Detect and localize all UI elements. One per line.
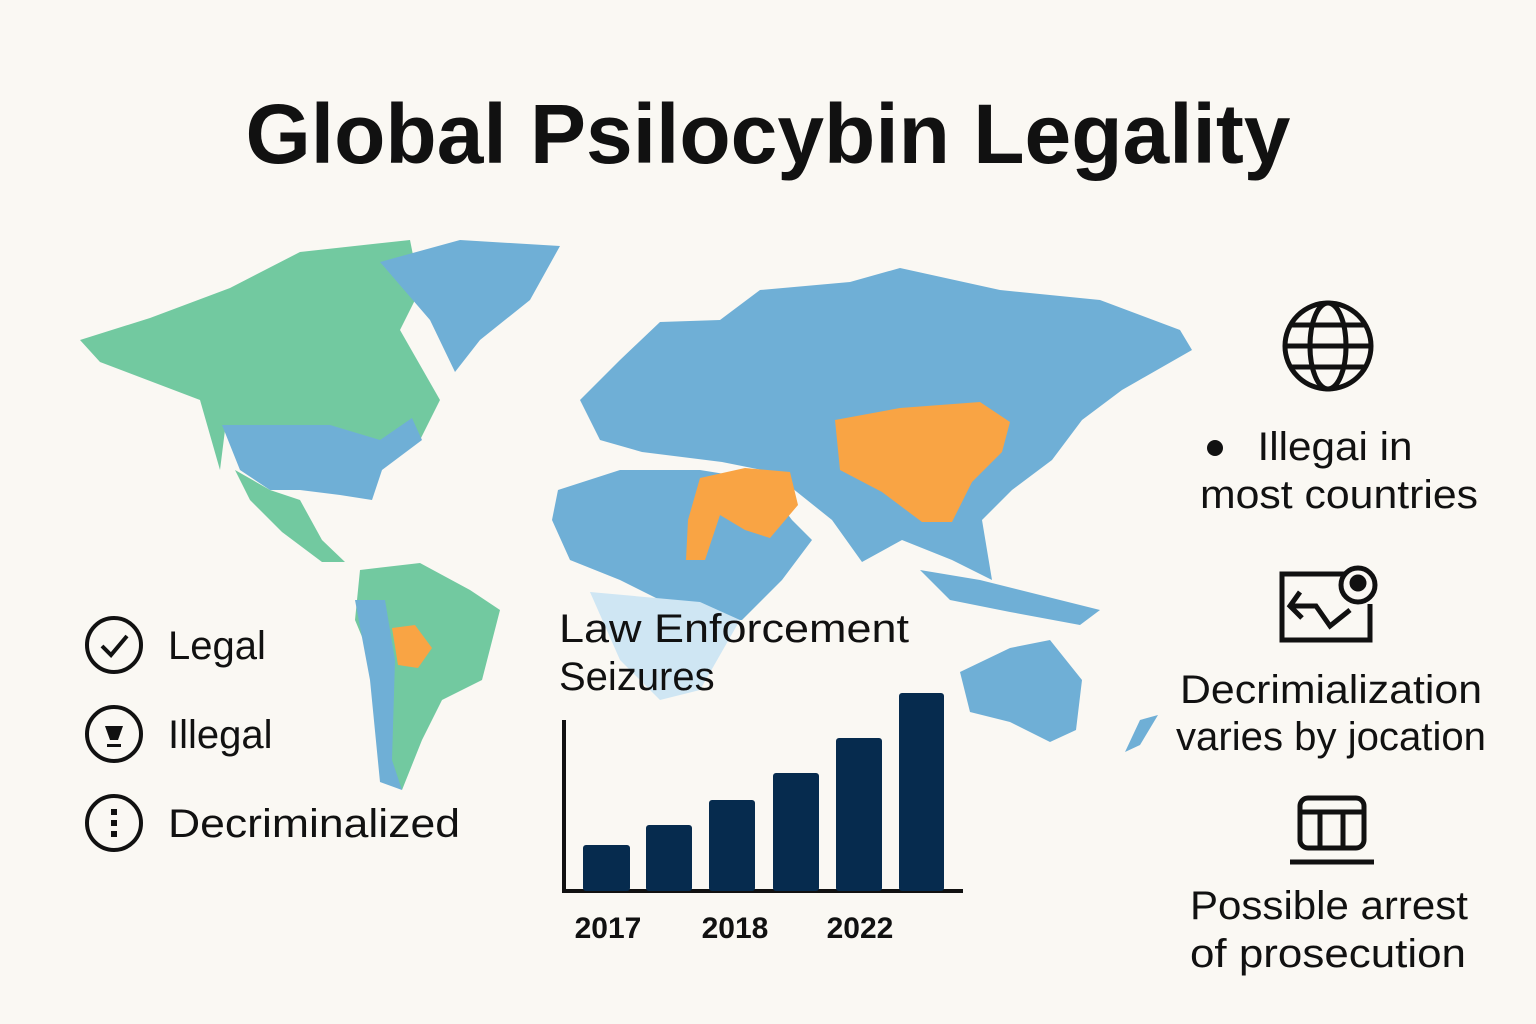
region: Australia (960, 640, 1082, 742)
region: South America (355, 563, 500, 790)
text: illegal in most countries: most countries (1200, 473, 1478, 517)
text: possible arrest: Possible arrest (1190, 884, 1468, 928)
region: Mexico (235, 470, 345, 562)
chart heading: Law Enforcement (559, 607, 909, 651)
text: possible arrest: of prosecution (1190, 932, 1466, 976)
bar chart: 2017 (575, 912, 641, 945)
icon: arrest (1290, 798, 1374, 862)
region: Greenland (380, 240, 560, 372)
region: Canada & Alaska (legal) (80, 240, 440, 470)
region: Bolivia (decriminalized) (392, 625, 432, 668)
icon: globe (1285, 303, 1371, 389)
legend item: illegal (87, 707, 273, 761)
title: Global Psilocybin Legality (246, 87, 1291, 181)
region: Africa (552, 470, 812, 620)
legend item: decriminalized: Decriminalized (168, 802, 460, 846)
region: USA (222, 418, 422, 500)
bar chart (562, 693, 963, 945)
text: decriminalization varies: varies by jocation (1176, 715, 1486, 759)
region: China (decriminalized) (835, 402, 1010, 522)
legend item: illegal: Illegal (168, 713, 273, 757)
legend item: legal: Legal (168, 624, 266, 668)
bar chart: 2022 (827, 912, 893, 945)
text: illegal in most countries: Illegai in (1258, 425, 1412, 469)
text: decriminalization varies: Decrimialization (1180, 668, 1482, 712)
text: illegal in most countries (1200, 425, 1478, 517)
region: Eurasia (580, 268, 1192, 580)
world map (80, 240, 1192, 790)
bar chart: 2018 (702, 912, 768, 945)
region: SE Asia islands (920, 570, 1100, 625)
legend (87, 618, 460, 850)
icon: map pin (1282, 568, 1375, 640)
legend item: decriminalized (87, 796, 460, 850)
legend item: legal (87, 618, 266, 672)
chart heading: Seizures (559, 655, 715, 699)
region: North Africa (decriminalized) (686, 468, 798, 560)
